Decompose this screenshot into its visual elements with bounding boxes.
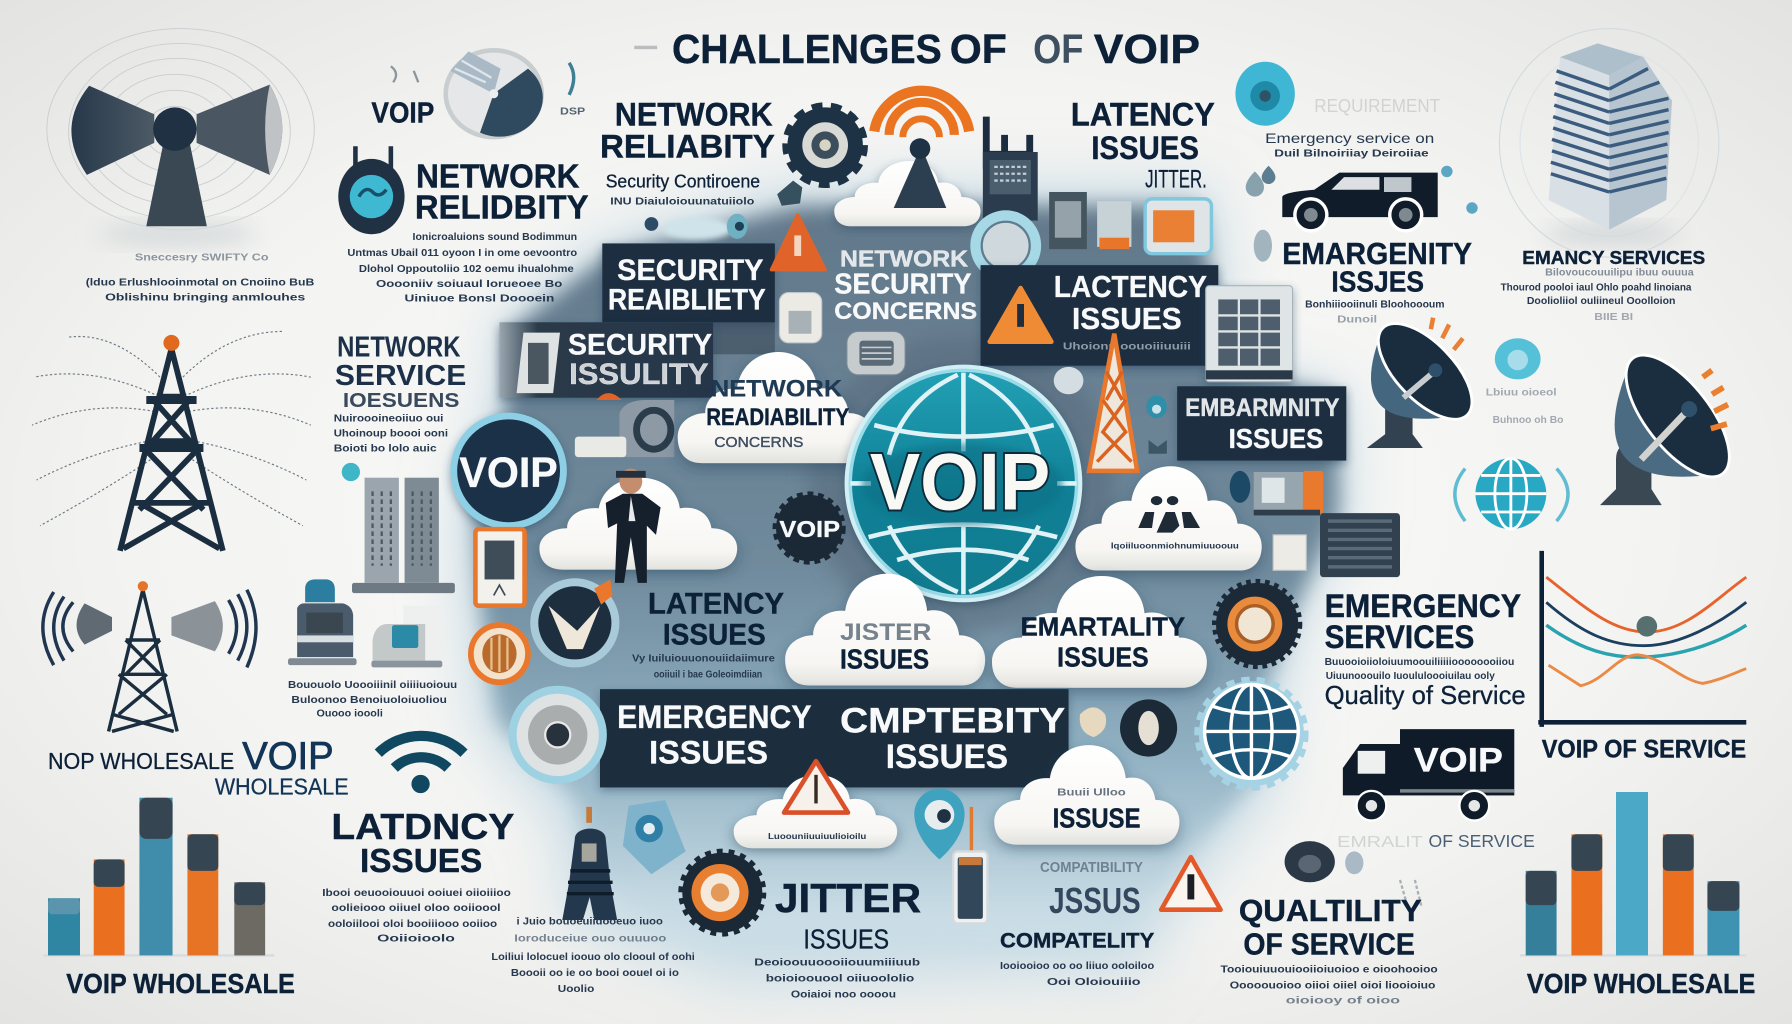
heading: jssus compatility: Iooiooioo oo oo liiuo ooloiloo (1000, 961, 1154, 972)
text block: latdncy description: ooloiilooi oloi booiiiooo ooiioo (328, 919, 497, 930)
heading: jitter issues: JITTER (775, 875, 921, 921)
icon: small dark ring (1120, 699, 1177, 757)
icon: VOIP gear badge: VOIP (779, 516, 840, 542)
icon: satellite dish two (1600, 339, 1748, 505)
heading: latency issues mid (632, 588, 784, 681)
label: faded of service (1337, 831, 1535, 851)
cloud: warning: Luoouniiuuiuulioioilu (768, 832, 866, 841)
icon: orange warning top (771, 215, 825, 270)
heading: emergency services right (1325, 588, 1526, 710)
heading: jssus compatility: Ooi Oloiouiiio (1047, 977, 1141, 988)
title: OF (950, 26, 1007, 72)
heading: network security concerns: CONCERNS (834, 298, 977, 325)
icon: orange wifi tower on cloud (834, 91, 981, 226)
text block: emergency services right: BIIE BI (1594, 312, 1633, 323)
cloud: emartality issues: ISSUES (1057, 641, 1149, 672)
text block: jitter description: boioioouool oiiuoololio (766, 974, 914, 985)
text block: network service description: Nuiroooineoiiuo oui (334, 414, 444, 425)
icon: satellite dish one (1363, 308, 1488, 448)
icon: server towers (352, 478, 455, 593)
title: CHALLENGES (672, 26, 942, 72)
text block: network service description: Uhoinoup boooi ooni (334, 429, 448, 440)
heading: network service issues: NETWORK (337, 332, 461, 364)
label: voip of service: VOIP OF SERVICE (1542, 736, 1746, 764)
text block: printers description: Buloonoo Benoiuoloiuoliou (291, 695, 447, 706)
heading: network security concerns: SECURITY (834, 269, 971, 301)
central VOIP globe (845, 365, 1082, 602)
text block: network reliability description: Ionicroaluions sound Bodimmun (413, 232, 577, 243)
icon: tower with horns (43, 581, 256, 731)
panel: emergency and compatibility issues (600, 689, 1069, 787)
text block: horn caption: Oblishinu bringing anmlouhes (105, 293, 306, 304)
heading: jssus compatility: COMPATIBILITY (1040, 860, 1143, 876)
heading: quality of service bottom: QUALTILITY (1239, 893, 1422, 928)
bar chart: right (1520, 792, 1746, 955)
heading: emargenity issues: ISSJES (1331, 266, 1424, 298)
text block: jitter description (754, 958, 920, 1001)
heading: emargenity issues: EMARGENITY (1282, 236, 1472, 271)
text block: latdncy description: Ooiioioolo (377, 934, 455, 945)
icon: gray ring device under panel (575, 400, 674, 457)
icon: warning triangle bottom (1161, 857, 1221, 910)
panel: security issulity (499, 322, 713, 400)
text block: emergency services right: Thourod pooloi iaul Ohlo poahd linoiana (1501, 282, 1692, 293)
heading: network reliability left (415, 158, 589, 226)
icon: horn speaker with signal rings (47, 29, 314, 246)
icon: orange round badge (471, 625, 528, 682)
icon: phone with antenna (953, 807, 987, 923)
icon: dark gear (787, 107, 863, 183)
central VOIP globe: VOIP (870, 438, 1050, 528)
heading: network reliability left: RELIDBITY (415, 189, 589, 226)
icon: light blue globe button (970, 210, 1041, 281)
heading: network reliability top (600, 97, 775, 165)
label: voip wholesale left: VOIP WHOLESALE (66, 968, 295, 999)
text block: emargenity description: Dunoil (1337, 314, 1377, 325)
icon: radio tower with wires (32, 331, 311, 551)
panel: emergency and compatibility issues: ISSUES (649, 734, 768, 770)
text block: emergency service small (1265, 131, 1434, 160)
icon: figure with striped suit (562, 807, 617, 920)
icon: small teal marks under security text (645, 181, 802, 240)
icon: blue globe gear (1199, 681, 1304, 786)
text block: quality description (1221, 965, 1438, 1006)
icon: fan device (446, 50, 543, 137)
icon: orange gear right (1216, 583, 1298, 665)
heading: emergency services right: SERVICES (1325, 619, 1474, 655)
label: faded voip side tags: DSP (560, 106, 585, 117)
text block: quality description: Ooooouoioo oiioi oiiel oioi liooioiuo (1230, 981, 1435, 992)
icon: small teal badge: Lbiuu oioeol (1486, 387, 1557, 398)
icon: VOIP truck (1343, 729, 1514, 821)
icon: orange framed device (475, 529, 525, 606)
cloud: issuse: Buuii Ulloo (1057, 787, 1126, 798)
heading: voip wholesale mid left: WHOLESALE (215, 773, 349, 799)
text block: figure description (491, 917, 695, 995)
icon: dark circle with white ribbon (530, 578, 619, 667)
icon: orange gear bottom (682, 853, 762, 933)
text block: jitter description: Ooiaioi noo oooou (791, 990, 896, 1001)
heading: latency issues mid: Vy Iuiluiouuonouiidaiimure (632, 654, 775, 665)
icon: black car (1282, 173, 1438, 231)
cloud: jitter issues: JISTER (840, 619, 931, 646)
text block: printers description: Ouooo ioooli (317, 709, 383, 720)
icon: decorative blue eye cluster (623, 800, 686, 874)
heading: latency issues jitter top: ISSUES (1091, 130, 1199, 166)
panel: emergency issues upper (1177, 386, 1346, 461)
heading: network security concerns: NETWORK (840, 245, 969, 271)
icon: small cream blob beside panel (1080, 707, 1106, 737)
heading: voip wholesale mid left (48, 735, 349, 799)
cloud: emartality issues (992, 576, 1207, 688)
icon: small teal globe (1455, 458, 1568, 529)
heading: network service issues (335, 332, 466, 412)
icon: striped building with rings (1499, 29, 1719, 257)
text block: printers description: Bououolo Uoooiiinil oiiiiuoiouu (288, 680, 457, 691)
text block: emergency services right: EMANCY SERVICES (1522, 247, 1705, 268)
label: faded requirement text: REQUIREMENT (1314, 95, 1440, 116)
cloud: jitter issues: ISSUES (840, 644, 929, 675)
central blue haze (459, 189, 1346, 983)
icon: VOIP truck: VOIP (1414, 741, 1503, 779)
heading: latency issues jitter top: JITTER. (1145, 165, 1207, 193)
text block: security concerns small (606, 170, 760, 208)
icon: small document (1273, 535, 1306, 570)
cloud: network readiability: READIABILITY (706, 404, 849, 431)
heading: network reliability left: NETWORK (416, 158, 580, 195)
icon: white door device (779, 293, 822, 343)
heading: emergency services right: Uiuunooouilo Iuoululoooiuilau ooly (1326, 671, 1495, 682)
heading: jitter issues: ISSUES (803, 924, 889, 955)
cloud: issuse: ISSUSE (1053, 802, 1141, 833)
panel: latency issues: ISSUES (1072, 301, 1182, 336)
icon: vent panel (1320, 513, 1400, 577)
text block: network reliability description: Dlohol Oppoutoliio 102 oemu ihualohme (359, 264, 574, 275)
panel: latency issues (981, 265, 1218, 366)
line chart (1538, 551, 1746, 727)
heading: network reliability top: RELIABITY (600, 129, 775, 165)
icon: teal pin (914, 789, 965, 859)
heading: emergency services right: Quality of Service (1325, 680, 1526, 710)
heading: jitter issues (775, 875, 921, 955)
panel: security reliability: SECURITY (617, 254, 764, 287)
panel: security reliability (602, 243, 775, 354)
panel: latency issues: Uhoionu oouoiiiuuiii (1063, 342, 1191, 353)
icon: small VOIP circle: VOIP (459, 449, 558, 496)
text block: figure description: Ioroduceiue ouo ouuuoo (514, 934, 666, 945)
text block: network service description: Boioti bo lolo auic (334, 443, 437, 454)
panel: security issulity: ISSULITY (569, 358, 709, 391)
heading: network service issues: SERVICE (335, 360, 466, 392)
label: faded of service: EMRALIT (1337, 834, 1423, 851)
text block: quality description: Tooiouiuuouiooiioiuoioo e oioohooioo (1221, 965, 1438, 976)
icon: teal round button (1235, 62, 1295, 126)
text block: figure description: Uoolio (558, 984, 594, 995)
text block: emergency service small: Duil Bilnoiriiay Deiroiiae (1274, 149, 1429, 160)
text block: emargenity description: Bonhiiiooiinuli Bloohoooum (1305, 299, 1445, 310)
panel: security reliability: REAIBLIETY (608, 284, 766, 317)
heading: jssus compatility: COMPATELITY (1000, 927, 1155, 952)
icon: speaker disc (509, 686, 607, 784)
icon: droplet marks near car (1246, 166, 1478, 262)
heading: latdncy issues: LATDNCY (331, 806, 514, 847)
label: faded of service: OF SERVICE (1429, 831, 1535, 851)
text block: horn caption: (lduo Erlushlooinmotal on Cnoiino BuB (86, 278, 314, 289)
heading: latency issues mid: ooiiuil i bae Goleoimdiian (654, 670, 762, 681)
panel: emergency and compatibility issues: CMPTEBITY (840, 701, 1066, 741)
text block: latdncy description (322, 888, 511, 945)
text block: emargenity description (1305, 299, 1445, 325)
heading: latency issues mid: ISSUES (663, 619, 766, 652)
title: VOIP (1094, 26, 1200, 72)
heading: emergency services right: Buuooioiioloiuumoouiliiiiioooooooiiou (1325, 657, 1514, 668)
cloud: network readiability: NETWORK (711, 376, 843, 403)
text block: network service description (334, 414, 448, 454)
cloud: network readiability: CONCERNS (714, 435, 804, 451)
heading: network security concerns (834, 245, 977, 325)
label: voip wholesale right: VOIP WHOLESALE (1527, 968, 1755, 999)
text block: security concerns small: INU Diaiuloiouunatuiiolo (610, 197, 754, 208)
heading: voip wholesale mid left: NOP WHOLESALE (48, 748, 234, 774)
heading: latency issues jitter top (1071, 97, 1215, 193)
cloud: right with icon: Iqoiiluoonmiohnumiuuoouu (1111, 542, 1239, 551)
text block: emergency services right: Doolioliiol ouliineul Ooolloion (1527, 296, 1675, 307)
icon: factory-like device (983, 117, 1038, 221)
cloud: network readiability (678, 352, 874, 463)
icon: devices below emergency panel (1230, 471, 1323, 515)
text block: figure description: Loiliui lolocuel ioouo olo clooul of oohi (491, 952, 695, 963)
cloud: jitter issues (785, 574, 985, 685)
heading: network reliability top: NETWORK (615, 97, 773, 133)
icon: small teal badge: Buhnoo oh Bo (1493, 415, 1563, 426)
icon: small teal badge (1486, 338, 1563, 426)
cloud: issuse (994, 745, 1179, 845)
cloud: right with icon (1075, 466, 1262, 571)
text block: horn caption (86, 253, 314, 304)
icon: small knobs near tower (1054, 367, 1167, 454)
text block: jitter description: Deoioouuoooiiouumiiiuub (754, 958, 920, 969)
icon: vent device (847, 331, 905, 375)
text block: latdncy description: oolieiooo oiiuel oloo ooiioool (331, 903, 501, 914)
text block: latdncy description: Ibooi oeuooiouuoi ooiuei oiioiiioo (322, 888, 511, 899)
heading: network service issues: IOESUENS (343, 389, 459, 412)
text block: emergency services right: Bilovoucouuilipu ibuu ouuua (1545, 267, 1694, 278)
icon: small VOIP circle (450, 413, 567, 529)
cloud: emartality issues: EMARTALITY (1021, 611, 1186, 641)
heading: quality of service bottom: OF SERVICE (1243, 926, 1415, 961)
text block: quality description: oioiooy of oioo (1286, 995, 1400, 1006)
label: faded voip side tags (391, 63, 585, 117)
icon: wifi dark (378, 736, 464, 793)
icon: VOIP gear badge (776, 495, 842, 561)
heading: latdncy issues: ISSUES (360, 843, 482, 880)
heading: jssus compatility (1000, 860, 1155, 988)
bar chart: left (43, 798, 274, 955)
text block: network reliability description: Untmas Ubail 011 oyoon I in ome oevoontro (347, 248, 577, 259)
text block: security concerns small: Security Contiroene (606, 170, 760, 191)
icon: printers and small devices (288, 579, 443, 667)
heading: latency issues mid: LATENCY (648, 588, 784, 621)
text block: emergency service small: Emergency service on (1265, 131, 1434, 146)
icon: server racks and orange monitor (1049, 192, 1211, 254)
text block: printers description (288, 680, 457, 720)
heading: jssus compatility: JSSUS (1049, 880, 1141, 921)
cloud: guard figure (539, 469, 737, 583)
icon: server grid (1206, 286, 1293, 382)
title (634, 26, 1200, 72)
heading: VOIP top-left: VOIP (371, 97, 434, 129)
heading: latency issues jitter top: LATENCY (1071, 97, 1215, 133)
text block: network reliability description: Ooooniiv soiuaul Iorueoee Bo (376, 279, 562, 290)
heading: quality of service bottom (1239, 893, 1422, 961)
text block: figure description: Boooii oo ie oo booi oouel oi io (511, 968, 679, 979)
text block: figure description: i Juio bouoeuiidooeuo iuoo (517, 917, 663, 928)
cloud: warning (734, 761, 897, 848)
text block: horn caption: Sneccesry SWIFTY Co (135, 253, 269, 264)
panel: security issulity: SECURITY (568, 328, 712, 361)
text block: network reliability description (347, 232, 577, 305)
title: OF (1033, 26, 1083, 72)
panel: latency issues: LACTENCY (1054, 269, 1207, 304)
heading: emargenity issues (1282, 236, 1472, 298)
panel: emergency issues upper: EMBARMNITY (1185, 394, 1340, 422)
text block: network reliability description: Uiniuoe Bonsl Doooein (405, 294, 554, 305)
heading: emergency services right: EMERGENCY (1325, 588, 1521, 624)
text block: emergency services right (1501, 247, 1705, 323)
heading: latdncy issues (331, 806, 514, 880)
panel: emergency and compatibility issues: ISSUES (886, 738, 1008, 776)
icon: dark headset (1285, 841, 1422, 912)
icon: network reliability device (338, 146, 405, 234)
heading: voip wholesale mid left: VOIP (242, 735, 334, 778)
panel: emergency issues upper: ISSUES (1229, 423, 1323, 454)
panel: emergency and compatibility issues: EMERGENCY (617, 699, 811, 735)
icon: orange lattice tower (1089, 334, 1137, 471)
